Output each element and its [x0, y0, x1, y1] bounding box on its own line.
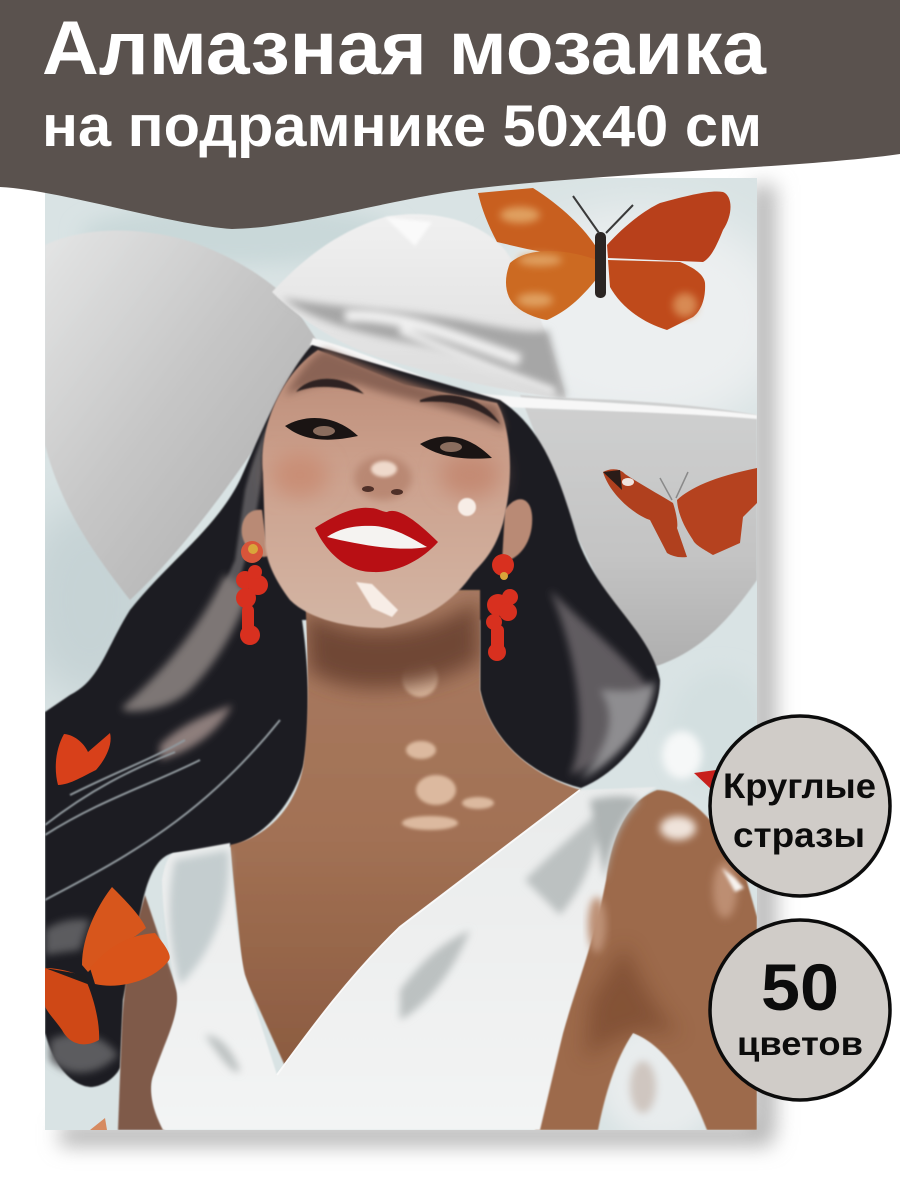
hat brim left [45, 230, 320, 600]
right arm and torso [535, 790, 757, 1130]
hat band light stripes [345, 316, 555, 392]
badge: round rhinestones [710, 716, 890, 896]
neck shadow [305, 600, 480, 688]
hair side strands near face [226, 424, 267, 586]
left ear [242, 510, 268, 557]
upper left wing [478, 188, 598, 262]
hat brim right [520, 395, 757, 668]
artwork background [20, 178, 790, 1140]
hat crown [272, 214, 566, 398]
hair sheen right [550, 590, 650, 775]
right wing highlight [673, 293, 697, 317]
hair sheen lower left [45, 919, 118, 1073]
lower right wing [608, 260, 705, 330]
sun patches on cheek and chin [356, 498, 476, 617]
header band [0, 0, 900, 229]
right ear [502, 499, 532, 562]
neck and chest [230, 590, 581, 1077]
dress neckline line [277, 790, 580, 1075]
nose [354, 456, 412, 500]
badge: round rhinestones: стразы [733, 816, 865, 855]
bottom orange fragment [90, 1118, 107, 1130]
left arm [118, 895, 178, 1130]
hat shadow on face [285, 350, 505, 430]
dress fold shadows [170, 796, 640, 1072]
hair grey strands [45, 720, 280, 900]
left wing highlights [500, 207, 562, 307]
shoulder highlights [588, 816, 744, 953]
white dress [151, 787, 657, 1130]
canvas shadow [60, 185, 776, 1146]
lower left wing [506, 251, 598, 320]
title: Алмазная мозаика [42, 6, 767, 91]
lips [315, 508, 438, 572]
eyebrows [296, 379, 500, 424]
badge: 50 colours [710, 920, 890, 1100]
hair sheen left [122, 575, 250, 711]
small butterfly edge [694, 770, 716, 790]
hat band shadow [282, 298, 566, 398]
hat front white edge [310, 338, 757, 419]
hair pink sheen [160, 705, 232, 760]
earring left [236, 541, 268, 645]
canvas artwork [20, 178, 790, 1140]
chest sunlight [402, 659, 494, 830]
body [595, 232, 606, 298]
butterfly top [478, 188, 730, 330]
badge: 50 colours: цветов [737, 1025, 863, 1062]
hair back [45, 345, 660, 1087]
arm crease shadow [582, 950, 672, 1054]
eyes [285, 418, 492, 459]
face [262, 350, 510, 628]
badge: 50 colours: 50 [761, 950, 839, 1024]
butterfly hair upper [56, 733, 111, 785]
butterfly hair lower [45, 887, 170, 1044]
badge: round rhinestones: Круглые [723, 767, 876, 806]
antennae [573, 196, 633, 233]
hair highlight right [580, 680, 655, 780]
butterfly right [603, 468, 757, 557]
subtitle: на подрамнике 50х40 см [42, 94, 762, 159]
cheek blush [272, 453, 500, 497]
earring right [486, 554, 518, 661]
crown light patch [390, 219, 428, 244]
upper right wing [607, 192, 730, 262]
